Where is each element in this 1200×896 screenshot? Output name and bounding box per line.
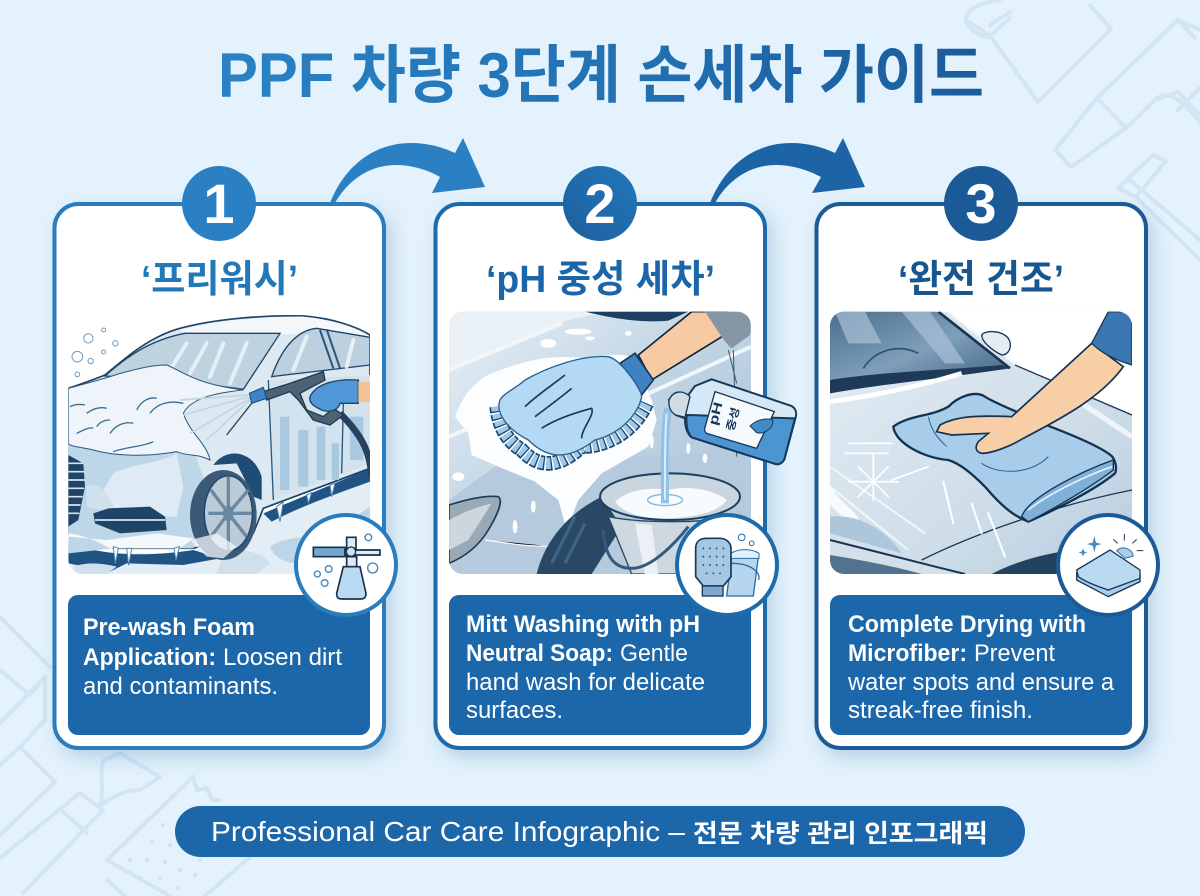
card 3 frame [816, 204, 1146, 748]
arrow from step 2 to step 3 [710, 138, 865, 203]
card 3 description: streak-free finish. [848, 697, 1033, 724]
card 3: complete drying [816, 166, 1158, 748]
number badge 1: 1 [203, 172, 235, 235]
card 2 description: Gentle [620, 640, 688, 667]
card 2: pH neutral wash [436, 166, 796, 748]
card 2 description: Neutral Soap: [466, 640, 613, 667]
card 1 description: Pre-wash Foam [83, 614, 255, 641]
card 2 heading: ‘pH 중성 세차’ [486, 259, 715, 301]
card 3 illustration: drying hood with microfiber towel [830, 312, 1132, 574]
card 1 description: Application: [83, 644, 216, 671]
card 2 frame [436, 204, 765, 748]
bottle label text: pH [706, 401, 726, 427]
number badge 2: 2 [584, 172, 616, 235]
card 2 description: surfaces. [466, 697, 563, 724]
bottle label korean text: 중성 [724, 406, 742, 432]
card 3 description: Prevent [974, 640, 1055, 667]
icon: folded towel with sparkle and sun badge [1058, 515, 1158, 615]
card 3 description: Complete Drying with [848, 611, 1086, 638]
card 2 description: hand wash for delicate [466, 669, 705, 696]
number badge 3: 3 [965, 172, 997, 235]
card 1 text panel [68, 595, 370, 735]
footer korean text: 전문 차량 관리 인포그래픽 [693, 820, 988, 848]
card 2 illustration: mitt, soap bottle and bucket [449, 312, 796, 574]
card 3 description: water spots and ensure a [847, 669, 1115, 696]
card 1 description: and contaminants. [83, 673, 278, 700]
card 2 description [466, 611, 705, 724]
card 2 text panel [449, 595, 751, 735]
card 2 description: Mitt Washing with pH [466, 611, 700, 638]
title: PPF 차량 3단계 손세차 가이드 [218, 41, 984, 111]
footer pill [175, 806, 1025, 857]
number badge 1 [182, 166, 256, 241]
card 1: pre-wash [54, 166, 396, 748]
card 3 description [847, 611, 1115, 724]
arrow from step 1 to step 2 [330, 138, 485, 203]
card 1 description [83, 614, 342, 700]
card 3 heading: ‘완전 건조’ [898, 259, 1064, 301]
card 1 illustration: foam-covered car being sprayed [68, 310, 372, 574]
number badge 3 [944, 166, 1018, 241]
footer english text: Professional Car Care Infographic – [211, 816, 685, 847]
card 1 description: Loosen dirt [223, 644, 342, 671]
icon: mitt and bucket badge [677, 515, 777, 615]
card 1 heading: ‘프리워시’ [141, 259, 298, 301]
card 3 description: Microfiber: [848, 640, 967, 667]
icon: foam cannon badge [296, 515, 396, 615]
card 1 frame [54, 204, 384, 748]
number badge 2 [563, 166, 637, 241]
card 3 text panel [830, 595, 1132, 735]
